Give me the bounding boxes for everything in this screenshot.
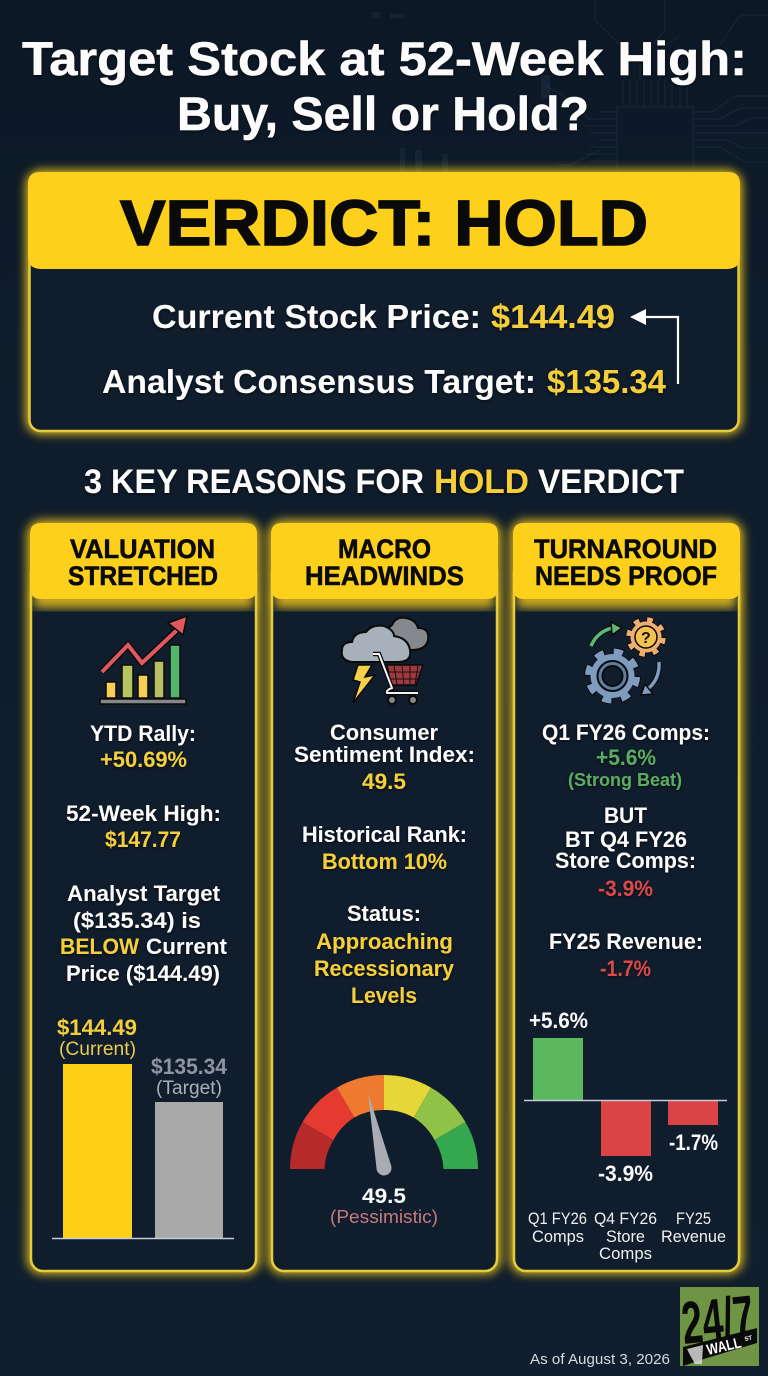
heading: 3 key reasons: VERDICT	[538, 463, 684, 501]
header: MACRO	[338, 534, 431, 564]
stat: analyst target below price: ($135.34) is	[73, 908, 201, 933]
bar chart: current vs target	[52, 1015, 234, 1238]
title: Target Stock at 52-Week High:	[22, 32, 747, 85]
stat: Q1 FY26 comps: (Strong Beat)	[568, 770, 682, 790]
arrow: target to current	[630, 309, 678, 384]
current stock price	[152, 298, 615, 335]
stat: analyst target below price: Price ($144.49)	[66, 961, 220, 986]
stat: historical rank: Bottom 10%	[322, 849, 447, 874]
bar chart: comps and revenue: -3.9%	[598, 1161, 653, 1186]
stat: historical rank	[302, 822, 467, 874]
header: TURNAROUND	[534, 534, 717, 564]
stat: consumer sentiment: 49.5	[362, 769, 406, 794]
title	[22, 32, 747, 140]
stat: analyst target below price: Analyst Target	[67, 881, 220, 906]
header: HEADWINDS	[305, 561, 464, 591]
heading: 3 key reasons: 3 KEY REASONS FOR	[84, 463, 424, 501]
stat: status	[314, 901, 454, 1008]
bar chart: comps and revenue	[524, 1008, 727, 1263]
stat: analyst target below price	[60, 881, 227, 986]
stat: consumer sentiment: Sentiment Index:	[294, 742, 475, 767]
verdict banner: VERDICT: HOLD	[120, 187, 648, 259]
stat: 52-week high: $147.77	[105, 827, 181, 852]
bar chart: current vs target: (Target)	[156, 1078, 222, 1099]
analyst consensus target: Analyst Consensus Target:	[102, 363, 536, 400]
stat: Q4 FY26 store comps	[555, 803, 696, 901]
current stock price: Current Stock Price:	[152, 298, 481, 335]
stat: historical rank: Historical Rank:	[302, 822, 467, 847]
gauge: consumer sentiment: (Pessimistic)	[330, 1207, 438, 1227]
bar chart: comps and revenue: Comps	[599, 1245, 652, 1263]
panel: valuation stretched	[30, 523, 257, 1271]
header: NEEDS PROOF	[535, 561, 717, 591]
stat: Q4 FY26 store comps: BT Q4 FY26	[565, 827, 687, 852]
bar chart: comps and revenue: +5.6%	[529, 1008, 588, 1033]
stat: Q4 FY26 store comps: -3.9%	[598, 876, 653, 901]
logo: 24/7 Wall St: WALL	[705, 1334, 743, 1359]
bar chart: comps and revenue: FY25	[676, 1210, 711, 1228]
gauge: consumer sentiment	[290, 1075, 478, 1227]
heading: 3 key reasons	[84, 463, 684, 501]
verdict banner	[28, 172, 740, 269]
bar chart: comps and revenue: Q1 FY26	[528, 1210, 587, 1228]
icon: gears and arrows	[588, 620, 663, 700]
header	[513, 523, 740, 599]
stat: FY25 revenue	[549, 929, 703, 981]
stat: 52-week high: 52-Week High:	[66, 801, 221, 826]
gauge: consumer sentiment: 49.5	[362, 1185, 406, 1208]
current stock price: $144.49	[491, 298, 615, 335]
stat: consumer sentiment: Consumer	[330, 720, 438, 745]
heading: 3 key reasons: HOLD	[434, 463, 529, 501]
icon: rising bar chart	[100, 616, 187, 704]
panel: turnaround needs proof	[513, 523, 740, 1271]
stat: status: Levels	[351, 983, 417, 1008]
icon: storm cloud and shopping cart	[342, 618, 428, 704]
panel: macro headwinds	[271, 523, 498, 1271]
stat: YTD rally	[90, 721, 196, 772]
bar chart: comps and revenue: Q4 FY26	[594, 1210, 657, 1228]
stat: analyst target below price: Current	[146, 934, 227, 959]
title: Buy, Sell or Hold?	[177, 87, 589, 140]
bar chart: current vs target: $144.49	[57, 1015, 137, 1040]
stat: YTD rally: YTD Rally:	[90, 721, 196, 746]
stat: YTD rally: +50.69%	[100, 747, 187, 772]
stat: analyst target below price: BELOW	[60, 934, 140, 959]
bar chart: comps and revenue: Comps	[532, 1228, 584, 1246]
stat: status: Recessionary	[314, 956, 454, 981]
header	[271, 523, 498, 599]
stat: Q1 FY26 comps: Q1 FY26 Comps:	[542, 720, 710, 745]
stat: status: Approaching	[316, 929, 453, 954]
icon: gears and arrows: ?	[641, 630, 651, 647]
stat: Q1 FY26 comps	[542, 720, 710, 790]
bar chart: comps and revenue: Store	[606, 1228, 645, 1246]
stat: consumer sentiment	[294, 720, 475, 794]
stat: Q1 FY26 comps: +5.6%	[596, 745, 656, 770]
panel: verdict	[28, 172, 740, 431]
bar chart: current vs target: $135.34	[151, 1054, 227, 1079]
stat: FY25 revenue: -1.7%	[600, 956, 651, 981]
bar chart: current vs target: (Current)	[59, 1039, 136, 1060]
stat: FY25 revenue: FY25 Revenue:	[549, 929, 703, 954]
date note: As of August 3, 2026	[530, 1352, 670, 1368]
stat: Q4 FY26 store comps: BUT	[604, 803, 647, 828]
logo: 24/7 Wall St: ST	[744, 1335, 753, 1343]
header	[30, 523, 257, 599]
header: VALUATION	[70, 534, 215, 564]
stat: Q4 FY26 store comps: Store Comps:	[555, 848, 696, 873]
header: STRETCHED	[68, 561, 218, 591]
stat: status: Status:	[347, 901, 421, 926]
stat: 52-week high	[66, 801, 221, 852]
bar chart: comps and revenue: -1.7%	[669, 1130, 718, 1155]
bar chart: comps and revenue: Revenue	[661, 1228, 726, 1246]
analyst consensus target: $135.34	[547, 363, 667, 400]
